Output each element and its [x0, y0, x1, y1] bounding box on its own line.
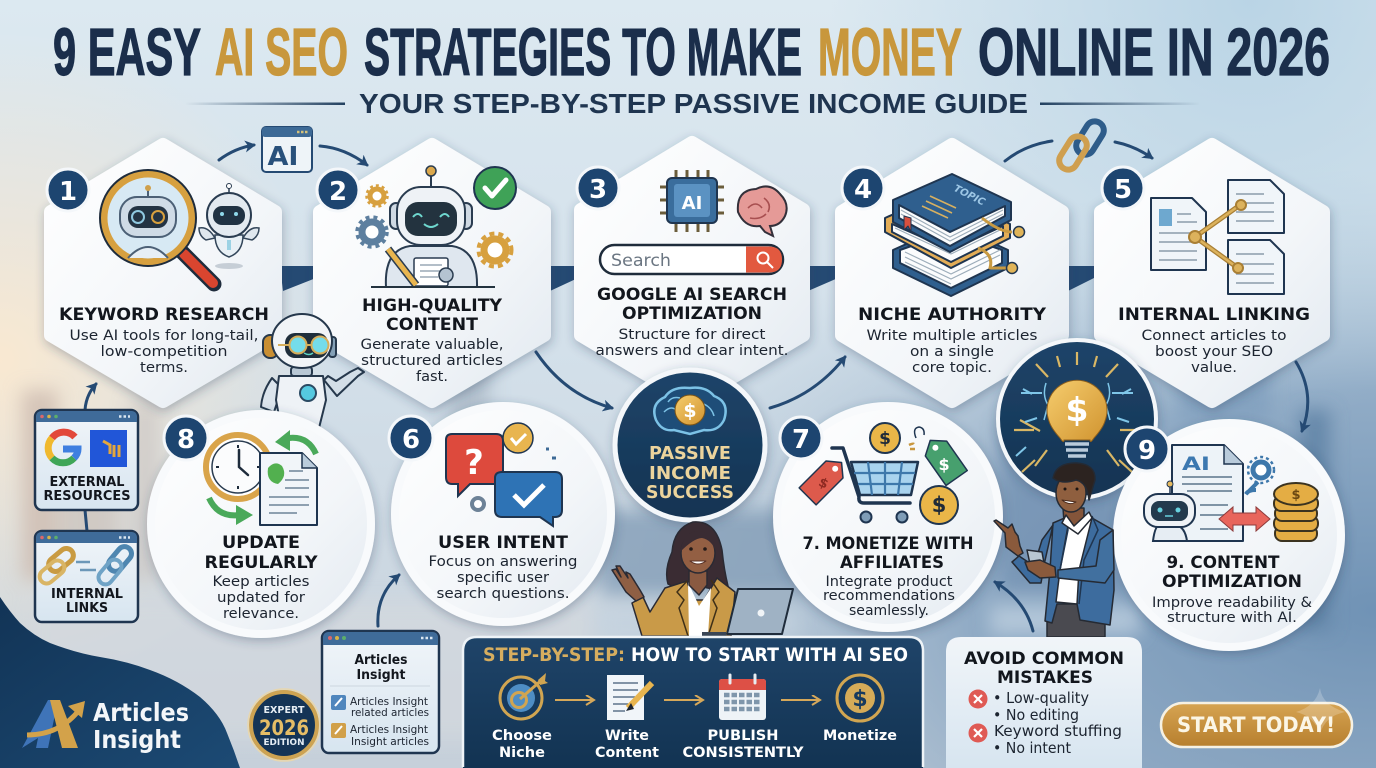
- icon: brain: [738, 186, 787, 236]
- description: terms.: [140, 360, 188, 376]
- number badges: 5: [1114, 175, 1132, 205]
- number badges: 8: [177, 425, 195, 455]
- box title: [354, 653, 408, 683]
- step labels: PUBLISH: [708, 728, 778, 744]
- heading: AFFILIATES: [840, 553, 944, 573]
- description: [823, 574, 955, 619]
- icon: shopping cart, coins and tags: [799, 423, 967, 524]
- heading: AVOID COMMON: [964, 649, 1124, 669]
- number badges: 1: [59, 177, 77, 207]
- mistakes list part 2: • No intent: [993, 739, 1071, 757]
- arrow: [664, 699, 702, 701]
- panel: step 4 niche authority: [842, 145, 1062, 401]
- icon: blue link: [331, 695, 346, 710]
- title: AI SEO: [215, 15, 348, 90]
- label: RESOURCES: [44, 489, 130, 504]
- description: [212, 574, 310, 622]
- link text 1: Articles Insight: [350, 696, 428, 708]
- description: [1152, 595, 1312, 626]
- heading: 9. CONTENT: [1166, 553, 1280, 573]
- badge: expert 2026 edition: EXPERT: [264, 705, 305, 716]
- description: value.: [1191, 360, 1237, 376]
- description: [596, 327, 788, 359]
- button: start today: START TODAY!: [1177, 713, 1335, 737]
- panel: step 7 monetize with affiliates: [777, 406, 999, 628]
- icon: dollar coin: [837, 675, 883, 721]
- icon: AI chip: [660, 170, 724, 232]
- icon: AI document, robot, coins: $: [1291, 488, 1301, 503]
- icon: AI chip: AI: [682, 193, 702, 214]
- icon: writing robot with gears: [357, 166, 516, 287]
- number badges: 6: [402, 425, 420, 455]
- navy connector band between hexagons: [280, 266, 1098, 291]
- mistakes list part 1: [993, 689, 1089, 724]
- icon: clock and document: [206, 430, 317, 525]
- illustration: woman with laptop: [612, 522, 793, 636]
- description: structured articles: [361, 353, 503, 369]
- link text 2: Insight articles: [351, 736, 429, 748]
- label: PASSIVE: [649, 443, 731, 464]
- link text 2: [350, 724, 429, 748]
- navy corner shape: [0, 597, 240, 768]
- icon: A with arrow: [22, 700, 85, 748]
- description: Write multiple articles: [866, 328, 1038, 344]
- icon: brain with dollar coin: [654, 388, 726, 434]
- step labels: [492, 728, 897, 761]
- box title: Articles: [354, 653, 408, 668]
- icon: chain link: [1056, 118, 1107, 173]
- description: Connect articles to: [1142, 328, 1286, 344]
- panel: step 1 keyword research: [51, 145, 275, 401]
- description: relevance.: [223, 606, 299, 622]
- description: low-competition: [100, 344, 228, 360]
- panel: step 8 update regularly: [151, 414, 371, 634]
- icon: glowing idea bulb circle: $: [1066, 390, 1088, 429]
- description: recommendations: [823, 588, 955, 604]
- description: Focus on answering: [428, 554, 578, 570]
- label: [646, 443, 734, 503]
- panel: avoid common mistakes: [946, 637, 1142, 768]
- logo: Articles Insight: [22, 698, 189, 754]
- icon: AI browser window: AI: [268, 142, 298, 172]
- icon: shopping cart, coins and tags: $: [879, 429, 891, 449]
- label: LINKS: [66, 601, 108, 616]
- icon: red cross 2: [968, 724, 988, 742]
- step labels: CONSISTENTLY: [682, 745, 804, 761]
- link text 2: Articles Insight: [350, 724, 428, 736]
- title: [53, 15, 1330, 90]
- label: SUCCESS: [646, 482, 734, 503]
- wordmark: Articles: [93, 698, 189, 727]
- icon: small flying robot: [199, 184, 259, 269]
- icon: G logo: [48, 432, 78, 463]
- icon: dollar coin: $: [852, 687, 868, 712]
- icon: question and check bubbles: [446, 423, 562, 526]
- icon: shopping cart, coins and tags: $: [938, 455, 950, 474]
- heading: STEP-BY-STEP:: [483, 644, 625, 666]
- panel: step 2 high-quality content: [320, 145, 544, 401]
- heading: GOOGLE AI SEARCH: [597, 285, 787, 305]
- arrow: [555, 699, 593, 701]
- icon: gold and blue chains: [37, 544, 134, 587]
- icon: red cross 1: [968, 690, 988, 708]
- number badges: 9: [1138, 436, 1156, 466]
- title: STRATEGIES TO MAKE: [364, 15, 802, 90]
- description: [866, 328, 1038, 376]
- icon: search bar: Search: [611, 251, 671, 271]
- heading: [1162, 553, 1302, 592]
- icon: search bar: [600, 245, 783, 274]
- label: EXTERNAL: [50, 475, 124, 490]
- icon: linked documents: [1151, 180, 1284, 294]
- icon: assistant robot with glasses: [261, 314, 364, 432]
- description: seamlessly.: [849, 603, 929, 619]
- icon: blue square logo: [90, 430, 127, 467]
- heading: HOW TO START WITH AI SEO: [631, 644, 908, 666]
- heading: [362, 296, 503, 335]
- description: structure with AI.: [1167, 610, 1297, 626]
- icon: AI document, robot, coins: [1144, 445, 1318, 541]
- icon: target: [500, 673, 548, 719]
- description: Integrate product: [826, 574, 953, 590]
- description: updated for: [217, 590, 305, 606]
- illustration: man with tablet: [994, 463, 1114, 637]
- label: [44, 475, 130, 504]
- mistakes list part 2: Keyword stuffing: [994, 722, 1122, 740]
- heading: [802, 534, 974, 573]
- icon: glowing idea bulb circle: [998, 340, 1156, 498]
- badge: expert 2026 edition: [248, 689, 320, 761]
- icon: gold link: [331, 723, 346, 738]
- heading: INTERNAL LINKING: [1118, 305, 1310, 325]
- button: start today: [1161, 688, 1352, 747]
- heading: [597, 285, 787, 324]
- number badges: 7: [792, 425, 810, 455]
- description: Generate valuable,: [360, 337, 504, 353]
- description: core topic.: [912, 360, 992, 376]
- description: Structure for direct: [618, 327, 766, 343]
- icon: document and pencil: [607, 675, 652, 720]
- heading: NICHE AUTHORITY: [858, 305, 1047, 325]
- box title: Insight: [356, 668, 406, 683]
- panel: external resources: [35, 410, 138, 510]
- description: specific user: [457, 570, 549, 586]
- heading: KEYWORD RESEARCH: [59, 305, 269, 325]
- icon: magnifier with robot: [100, 170, 214, 284]
- step labels: Content: [595, 745, 659, 761]
- heading: [204, 533, 318, 573]
- description: Keep articles: [212, 574, 310, 590]
- arrows between top steps: [85, 141, 1308, 631]
- panel: step-by-step how to start: [463, 637, 923, 768]
- heading: OPTIMIZATION: [622, 304, 762, 324]
- description: search questions.: [436, 586, 570, 602]
- icon: shopping cart, coins and tags: $: [932, 493, 946, 517]
- arrow: [781, 699, 819, 701]
- wordmark: Insight: [93, 725, 181, 754]
- panel: step 9 content optimization: [1117, 423, 1341, 647]
- mistakes list part 1: • No editing: [993, 706, 1079, 724]
- step labels: Choose: [492, 728, 552, 744]
- icon: question and check bubbles: ?: [464, 443, 484, 483]
- description: [70, 328, 258, 376]
- description: on a single: [910, 344, 994, 360]
- link text 1: related articles: [351, 707, 429, 719]
- number badges: 4: [854, 175, 872, 205]
- number badges: 3: [589, 175, 607, 205]
- label: INCOME: [649, 463, 731, 484]
- heading: 7. MONETIZE WITH: [802, 534, 974, 554]
- heading: HIGH-QUALITY: [362, 296, 503, 316]
- callout: passive income success: [615, 370, 765, 520]
- heading: REGULARLY: [204, 553, 318, 573]
- link text 1: [350, 696, 429, 719]
- heading: USER INTENT: [438, 533, 568, 553]
- description: Improve readability &: [1152, 595, 1312, 611]
- wordmark: [93, 698, 189, 754]
- number badges: 2: [329, 177, 347, 207]
- heading: CONTENT: [386, 315, 478, 335]
- icon: book stack: [885, 174, 1024, 296]
- description: [428, 554, 578, 602]
- label: [51, 587, 123, 616]
- description: fast.: [416, 369, 448, 385]
- description: [360, 337, 504, 385]
- title: MONEY: [818, 15, 962, 90]
- mistakes list part 1: • Low-quality: [993, 689, 1089, 707]
- panel: step 6 user intent: [395, 406, 611, 622]
- panel: step 5 internal linking: [1101, 145, 1323, 401]
- heading: UPDATE: [222, 533, 300, 553]
- description: Use AI tools for long-tail,: [70, 328, 258, 344]
- badge: expert 2026 edition: EDITION: [264, 738, 304, 748]
- icon: AI browser window: [262, 127, 312, 172]
- description: [1142, 328, 1286, 376]
- heading: [483, 644, 908, 666]
- label: INTERNAL: [51, 587, 123, 602]
- icon: calendar: [719, 675, 766, 720]
- heading: [964, 649, 1124, 688]
- icon: shopping cart, coins and tags: $: [816, 475, 831, 493]
- heading: OPTIMIZATION: [1162, 572, 1302, 592]
- panel: step 3 google ai search optimization: [581, 143, 803, 401]
- title: 9 EASY: [53, 15, 201, 90]
- step labels: Niche: [499, 745, 545, 761]
- icon: brain with dollar coin: $: [683, 400, 697, 422]
- panel: internal links: [35, 531, 138, 622]
- badge: expert 2026 edition: 2026: [259, 716, 309, 740]
- description: answers and clear intent.: [596, 343, 788, 359]
- description: boost your SEO: [1155, 344, 1273, 360]
- step labels: Write: [605, 728, 649, 744]
- subtitle: YOUR STEP-BY-STEP PASSIVE INCOME GUIDE: [359, 88, 1028, 119]
- panel: articles insight box: [322, 631, 439, 753]
- number badges: [47, 167, 1169, 471]
- heading: MISTAKES: [997, 668, 1093, 688]
- step labels: Monetize: [823, 728, 897, 744]
- mistakes list part 2: [993, 722, 1122, 757]
- icon: AI document, robot, coins: AI: [1182, 453, 1210, 475]
- icon: book stack: TOPIC: [952, 183, 987, 209]
